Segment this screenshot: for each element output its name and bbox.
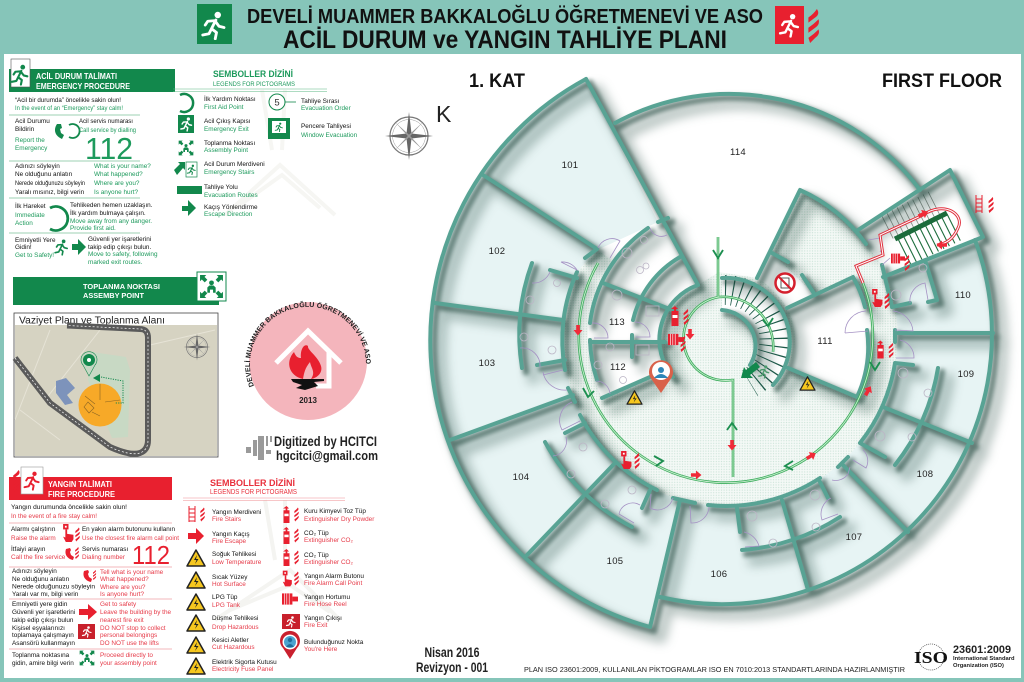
map orange building [78, 384, 122, 426]
legend item: hot surface [187, 572, 248, 588]
text block: dial 112: Acil servis numarası [79, 118, 133, 125]
text block: questions: Is anyone hurt? [100, 591, 145, 598]
text block: get to safety: Emniyetli Yere [15, 237, 56, 244]
legend item: hot surface: Sıcak Yüzey [212, 574, 248, 581]
watermark torch [225, 90, 335, 215]
heading: emergency procedure bar: ACİL DURUM TALİMATI [36, 71, 117, 81]
legend item: evacuation order [269, 94, 352, 112]
legend item: exit: Emergency Exit [204, 126, 249, 133]
text block: call fire service: Call the fire service [11, 554, 66, 561]
text block: questions: Nerede olduğunuzu söyleyin [12, 584, 95, 590]
text block: get to safety: Güvenli yer işaretlerini [12, 609, 75, 616]
map green zone [88, 352, 130, 438]
text block: questions: Adınızı söyleyin [15, 163, 60, 170]
text block: get to safety [12, 601, 172, 647]
heading: fire procedure bar [9, 467, 172, 500]
room numbers: 110 [955, 290, 971, 301]
legend item: you are here [280, 631, 364, 659]
legend item: stairs [174, 161, 265, 177]
text block: report: Acil Durumu [15, 118, 50, 125]
legend item: window: Pencere Tahliyesi [301, 123, 351, 130]
legend item: cut hazard: Cut Hazardous [212, 644, 255, 651]
legend item: CO2: CO₂ Tüp [304, 530, 329, 537]
map blue neighbour building [56, 378, 75, 405]
heading: assembly point bar: ASSEMBY POINT [83, 291, 144, 300]
icon: phone [55, 124, 80, 139]
legend item: stairs: Emergency Stairs [204, 169, 254, 176]
map title: Vaziyet Planı ve Toplanma Alanı [19, 316, 165, 326]
text block: get to safety: nearest fire exit [100, 617, 144, 624]
legend item: drop hazard [187, 615, 259, 631]
heading: red legend: LEGENDS FOR PICTOGRAMS [210, 489, 297, 496]
ISO logo and standard number: 23601:2009 [953, 644, 1011, 656]
revision date: Revizyon - 001 [416, 660, 488, 675]
text block: get to safety: DO NOT stop to collect [100, 625, 166, 632]
text block: questions [15, 163, 151, 196]
text block: raise alarm [11, 524, 179, 542]
text block: questions: What happened? [100, 576, 149, 583]
legend item: CO2 [283, 527, 354, 544]
legend item: fire exit [282, 614, 342, 629]
text block: call fire service: Dialing number [82, 554, 126, 561]
text block: report [15, 118, 50, 152]
icon: green emergency exit [197, 4, 232, 44]
text block: get to safety: Asansörü kullanmayın [12, 640, 75, 647]
heading: fire procedure bar: YANGIN TALİMATI [48, 480, 112, 489]
text block: assembly: gidin, amire bilgi verin [12, 660, 74, 667]
text block: get to safety: Gidin! [15, 244, 32, 251]
legend item: hose: Yangın Hortumu [304, 594, 351, 601]
credit: digitized by [246, 434, 378, 463]
legend item: CO2 second: Extinguisher CO₂ [304, 559, 354, 566]
text block: get to safety [15, 236, 158, 266]
text block: get to safety: Kişisel eşyalarınızı [12, 625, 65, 632]
text block: assembly: Toplanma noktasına [12, 652, 70, 659]
text block: assembly [12, 651, 157, 667]
text block: questions: Yaralı mısınız, bilgi verin [15, 189, 85, 196]
legend item: CO2: Extinguisher CO₂ [304, 537, 354, 544]
icon: assembly point [197, 272, 226, 301]
legend item: hot surface: Hot Surface [212, 581, 246, 588]
header band [0, 0, 1024, 54]
legend item: first aid [180, 94, 256, 112]
legend item: evacuation order: Evacuation Order [301, 105, 352, 112]
map roads [15, 326, 148, 454]
room numbers: 108 [917, 469, 933, 480]
text block: get to safety: Move to safety, following [88, 251, 158, 258]
compass: K [436, 101, 452, 127]
ISO logo and standard number [914, 644, 1015, 670]
legend item: low temperature: Soğuk Tehlikesi [212, 551, 256, 558]
icons: fire equipment [621, 195, 994, 469]
legend item: escape direction: Escape Direction [204, 211, 253, 218]
panel: fire pictogram legend [183, 478, 375, 674]
text block: first action: Immediate [15, 212, 45, 219]
title: school name: DEVELİ MUAMMER BAKKALOĞLU ÖĞRETMENEVİ VE ASO [247, 4, 763, 28]
text block: dial 112: 112 [85, 131, 133, 166]
text block: call fire service: İtfaiyi arayın [11, 544, 46, 553]
text block: raise alarm: Alarmı çalıştırın [11, 526, 56, 533]
room numbers: 107 [846, 532, 862, 543]
panel: fire procedure [9, 467, 179, 667]
legend item: evacuation order: Tahliye Sırası [301, 98, 340, 105]
legend item: assembly [179, 140, 255, 155]
legend item: fire stairs: Yangın Merdiveni [212, 509, 261, 516]
legend item: assembly: Toplanma Noktası [204, 140, 255, 147]
room numbers: 112 [610, 362, 626, 373]
legend item: first aid: First Aid Point [204, 104, 244, 111]
text block: first action: Action [15, 220, 33, 227]
heading: red legend [183, 478, 345, 500]
text block: get to safety: Emniyetli yere gidin [12, 601, 68, 608]
icon: no lift sign [776, 274, 794, 292]
text block: dial 112: Call service by dialling [79, 127, 136, 134]
legend item: CO2 second: CO₂ Tüp [304, 552, 329, 559]
room numbers: 102 [489, 246, 505, 257]
text block: get to safety: Get to Safety! [15, 252, 54, 259]
text block: stay calm: In the event of a fire stay calm! [11, 513, 97, 520]
text block: stay calm [11, 504, 127, 520]
legend item: LPG tank [187, 594, 241, 610]
legend item: hose: Fire Hose Reel [304, 601, 347, 608]
text block: raise alarm: Use the closest fire alarm call point [82, 535, 179, 542]
heading: green legend: LEGENDS FOR PICTOGRAMS [213, 81, 295, 88]
site plan map [14, 313, 218, 457]
text block: report: Bildirin [15, 126, 35, 133]
map compass [184, 334, 210, 360]
standards note: PLAN ISO 23601:2009, KULLANILAN PİKTOGRAMLAR ISO EN 7010:2013 STANDARTLARINDA HAZIRLANMIŞTIR [524, 665, 906, 674]
room numbers: 104 [513, 472, 529, 483]
heading: green legend: SEMBOLLER DİZİNİ [213, 69, 293, 79]
icon: you are here pin [649, 360, 673, 393]
text block: questions [12, 568, 164, 598]
legend item: you are here: You're Here [304, 646, 338, 653]
green direction arrows [583, 250, 880, 470]
legend item: routes: Tahliye Yolu [204, 184, 238, 191]
green exit arrow [741, 362, 760, 378]
heading: emergency procedure bar: EMERGENCY PROCEDURE [36, 82, 130, 91]
legend item: assembly: Assembly Point [204, 147, 248, 154]
legend item: evacuation order: 5 [274, 98, 280, 108]
text block: questions: Where are you? [94, 180, 140, 187]
compass [385, 101, 452, 160]
text block: raise alarm: Raise the alarm [11, 535, 56, 542]
room fills: outer pale rooms [430, 79, 992, 627]
text block: raise alarm: En yakın alarm butonunu kullanın [82, 526, 175, 533]
map pin [81, 352, 97, 376]
legend item: routes [177, 184, 258, 199]
logo: school emblem: 2013 [299, 396, 317, 405]
green evacuation route [579, 237, 873, 483]
text block: get to safety: DO NOT use the lifts [100, 640, 159, 647]
legend item: you are here: Bulunduğunuz Nokta [304, 639, 364, 646]
legend item: exit [178, 115, 251, 133]
legend item: escape direction [182, 200, 258, 218]
legend item: low temperature [187, 550, 262, 566]
legend item: cut hazard: Kesici Aletler [212, 637, 249, 644]
credit: digitized by: hgcitci@gmail.com [276, 448, 378, 463]
floor plan [430, 79, 994, 627]
legend item: window: Window Evacuation [301, 132, 358, 139]
text block: stay calm: Yangın durumunda öncelikle sakin olun! [11, 504, 127, 511]
legend item: fuse panel: Elektrik Sigorta Kutusu [212, 659, 277, 666]
text block: questions: Is anyone hurt? [94, 189, 139, 196]
legend item: stairs: Acil Durum Merdiveni [204, 161, 265, 168]
white inner rooms [722, 253, 871, 397]
legend item: dry powder: Kuru Kimyevi Toz Tüp [304, 508, 366, 515]
heading: assembly point bar [13, 277, 219, 305]
heading: red legend: SEMBOLLER DİZİNİ [210, 478, 295, 488]
text block: questions: Yaralı var mı, bilgi verin [12, 591, 79, 598]
room numbers: 109 [958, 369, 974, 380]
revision date [416, 645, 488, 675]
watermark torch [215, 500, 340, 620]
legend item: fuse panel: Electricity Fuse Panel [212, 666, 273, 673]
logo: school emblem: DEVELİ MUAMMER BAKKALOĞLU ÖĞRETMENEVİ VE ASO [244, 300, 371, 388]
room numbers: 103 [479, 358, 495, 369]
text block: questions: Adınızı söyleyin [12, 568, 57, 575]
legend item: fire exit: Fire Exit [304, 622, 328, 629]
room numbers: 113 [609, 317, 625, 328]
text block: get to safety: Güvenli yer işaretlerini [88, 236, 151, 243]
label: floor number: 1. KAT [469, 71, 525, 92]
legend item: LPG tank: LPG Tüp [212, 594, 238, 601]
legend item: exit: Acil Çıkış Kapısı [204, 118, 251, 125]
legend item: drop hazard: Drop Hazardous [212, 624, 259, 631]
legend item: fire escape [188, 528, 250, 545]
text block: call fire service: Servis numarası [82, 546, 128, 553]
room numbers: 105 [607, 556, 623, 567]
text block: first action: Tehlikeden hemen uzaklaşın. [70, 202, 153, 209]
legend item: low temperature: Low Temperature [212, 559, 262, 566]
ISO logo and standard number: International Standard [953, 656, 1015, 662]
text block: stay calm [15, 97, 123, 112]
text block: questions: What happened? [94, 171, 143, 178]
map evacuation path [101, 377, 123, 403]
icon: red fire exit [775, 6, 819, 44]
text block: stay calm: In the event of an “Emergency” stay calm! [15, 105, 123, 112]
legend item: escape direction: Kaçış Yönlendirme [204, 204, 258, 211]
red fire route [856, 209, 959, 283]
legend item: fire escape: Yangın Kaçış [212, 531, 250, 538]
heading: assembly point bar: TOPLANMA NOKTASI [83, 282, 160, 291]
icons: warning triangles [627, 377, 815, 404]
revision date: Nisan 2016 [424, 645, 480, 660]
text block: first action: İlk yardım bulmaya çalışın. [70, 208, 146, 217]
legend item: alarm [283, 571, 364, 587]
sanitary fixtures [520, 236, 932, 547]
icon: runner at stairs [759, 365, 769, 378]
room numbers [479, 147, 974, 580]
heading: fire procedure bar: FIRE PROCEDURE [48, 490, 116, 499]
panel: emergency procedure [9, 59, 175, 266]
text block: questions: Ne olduğunu anlatın [15, 171, 73, 178]
text block: get to safety: takip edip çıkışı bulun. [88, 244, 151, 251]
ISO logo and standard number: ISO [914, 648, 948, 667]
legend item: LPG tank: LPG Tank [212, 602, 241, 609]
heading: emergency procedure bar [9, 59, 175, 92]
panel: green pictogram legend [173, 69, 358, 218]
legend item: first aid: İlk Yardım Noktası [204, 94, 256, 103]
text block: stay calm: “Acil bir durumda” öncelikle sakin olun! [15, 97, 121, 104]
legend item: cut hazard [187, 637, 255, 653]
door swings [520, 228, 928, 547]
text block: get to safety: Get to safety [100, 601, 137, 608]
legend item: fuse panel [187, 658, 277, 674]
corridor floor [563, 190, 898, 506]
room numbers: 101 [562, 160, 578, 171]
room numbers: 111 [817, 336, 833, 347]
heading: green legend [173, 69, 327, 92]
text block: report: Report the [15, 137, 45, 144]
label: first floor: FIRST FLOOR [882, 71, 1002, 92]
legend item: window [268, 118, 358, 139]
text block: questions: Tell what is your name [100, 569, 164, 576]
panel: assembly point [13, 272, 226, 457]
legend item: alarm: Yangın Alarm Butonu [304, 573, 364, 580]
legend item: alarm: Fire Alarm Call Point [304, 580, 362, 587]
text block: get to safety: personal belongings [100, 632, 157, 639]
legend item: hose [282, 593, 351, 608]
text block: get to safety: marked exit routes. [88, 259, 143, 266]
legend item: dry powder: Extinguisher Dry Powder [304, 516, 375, 523]
stair treads [725, 203, 956, 383]
legend item: drop hazard: Düşme Tehlikesi [212, 615, 258, 622]
text block: assembly: Proceed directly to [100, 652, 153, 659]
text block: call fire service [11, 540, 170, 570]
legend item: dry powder [283, 506, 375, 523]
walls [430, 79, 993, 627]
legend item: fire escape: Fire Escape [212, 538, 247, 545]
text block: questions: What is your name? [94, 163, 151, 170]
red direction arrows [574, 208, 947, 479]
text block: dial 112 [79, 118, 136, 166]
credit: digitized by: Digitized by HCITCI [274, 434, 377, 449]
room numbers: 106 [711, 569, 727, 580]
legend item: fire exit: Yangın Çıkışı [304, 615, 342, 622]
title: plan name: ACİL DURUM ve YANGIN TAHLİYE PLANI [283, 26, 727, 54]
legend item: CO2 second [283, 549, 354, 566]
legend item: fire stairs [189, 506, 261, 523]
text block: get to safety: toplamaya çalışmayın [12, 632, 74, 639]
ISO logo and standard number: Organization (ISO) [953, 663, 1004, 669]
room numbers: 114 [730, 147, 746, 158]
text block: first action: Provide first aid. [70, 225, 116, 232]
text block: questions: Nerede olduğunuzu söyleyin [15, 180, 85, 187]
text block: questions: Ne olduğunu anlatın [12, 576, 70, 583]
text block: first action: İlk Hareket [15, 201, 46, 210]
text block: report: Emergency [15, 145, 48, 152]
legend item: fire stairs: Fire Stairs [212, 516, 241, 523]
text block: get to safety: takip edip çıkışı bulun [12, 617, 74, 624]
legend item: routes: Evacuation Routes [204, 192, 258, 199]
text block: first action [15, 201, 153, 232]
text block: first action: Move away from any danger. [70, 218, 152, 225]
text block: get to safety: Leave the building by the [100, 609, 172, 616]
text block: assembly: your assembly point [100, 660, 157, 667]
text block: questions: Where are you? [100, 584, 146, 591]
text block: call fire service: 112 [132, 540, 170, 570]
stairs landing bar [895, 213, 947, 239]
